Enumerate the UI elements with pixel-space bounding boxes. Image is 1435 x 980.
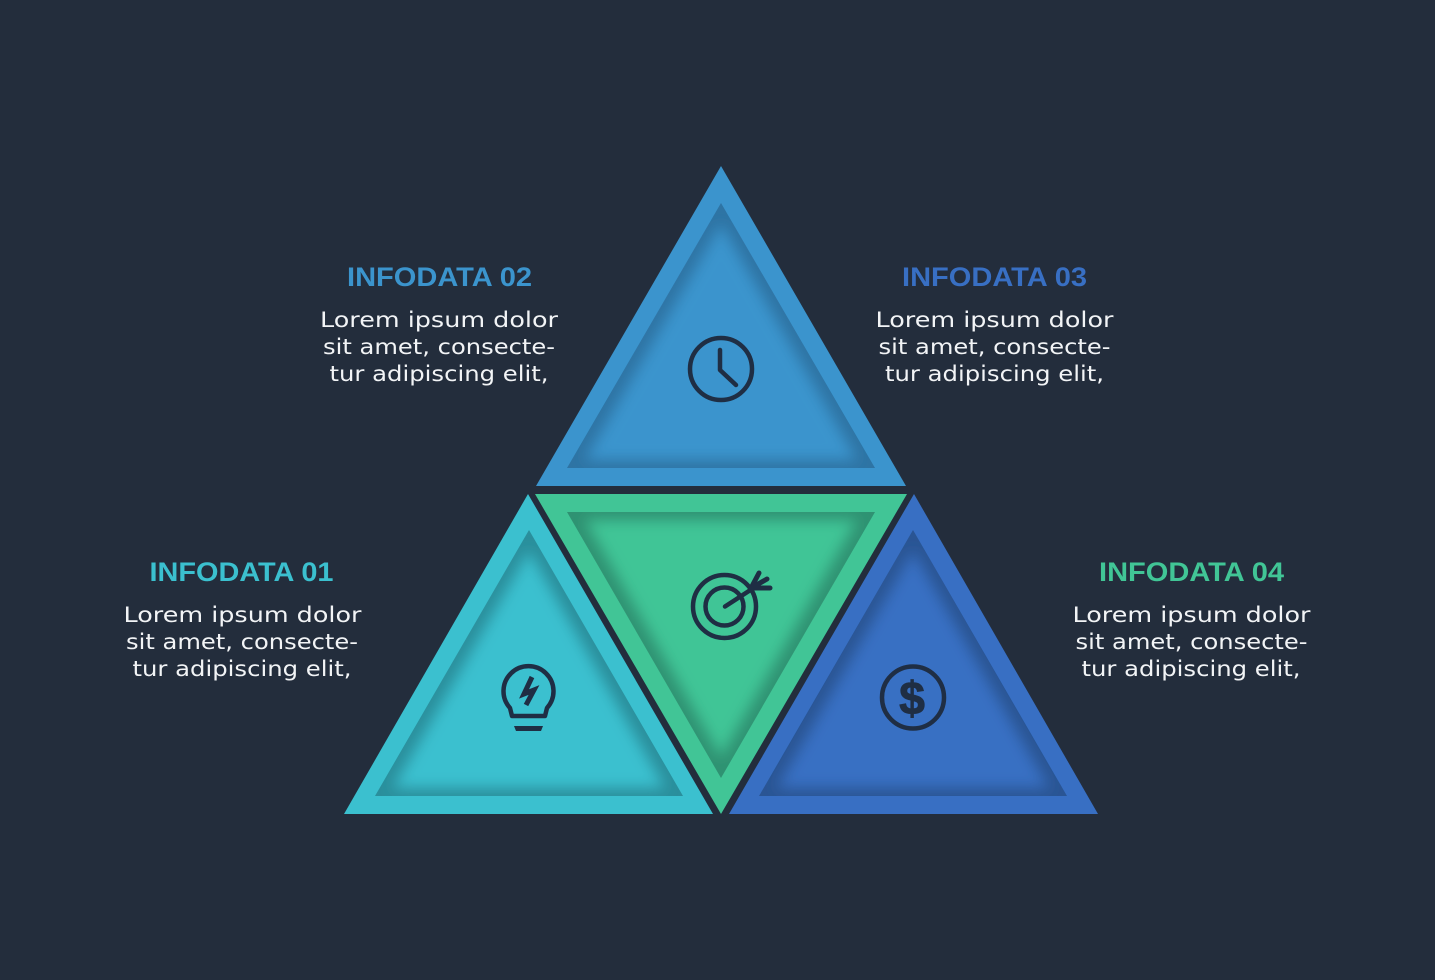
text block: Infodata 01: tur adipiscing elit, bbox=[132, 657, 352, 682]
text block: Infodata 02: sit amet, consecte- bbox=[323, 335, 555, 360]
text block: Infodata 03: INFODATA 03 bbox=[902, 262, 1087, 292]
text block: Infodata 01: INFODATA 01 bbox=[150, 557, 334, 587]
text block: Infodata 02 bbox=[320, 262, 558, 387]
triangle: left, Infodata 01 bbox=[344, 494, 713, 814]
triangle: top, Infodata 02 bbox=[536, 166, 906, 486]
text block: Infodata 01 bbox=[124, 557, 362, 682]
text block: Infodata 04: INFODATA 04 bbox=[1099, 557, 1284, 587]
icon: dollar coin: $ bbox=[899, 672, 925, 724]
text block: Infodata 02: tur adipiscing elit, bbox=[330, 362, 548, 387]
text block: Infodata 02: INFODATA 02 bbox=[347, 262, 532, 292]
text block: Infodata 01: Lorem ipsum dolor bbox=[124, 603, 362, 628]
triangle: right, Infodata 04 bbox=[729, 494, 1098, 814]
text block: Infodata 03: tur adipiscing elit, bbox=[885, 362, 1104, 387]
text block: Infodata 04: tur adipiscing elit, bbox=[1082, 657, 1300, 682]
text block: Infodata 03: Lorem ipsum dolor bbox=[876, 308, 1114, 333]
text block: Infodata 01: sit amet, consecte- bbox=[126, 630, 358, 655]
text block: Infodata 03: sit amet, consecte- bbox=[878, 335, 1110, 360]
triangle: centre, inverted green bbox=[535, 494, 907, 814]
text block: Infodata 04: Lorem ipsum dolor bbox=[1072, 603, 1311, 628]
icon: clock bbox=[690, 338, 752, 400]
text block: Infodata 04: sit amet, consecte- bbox=[1076, 630, 1308, 655]
icon: target with arrow bbox=[693, 573, 770, 638]
text block: Infodata 02: Lorem ipsum dolor bbox=[320, 308, 558, 333]
icon: dollar coin bbox=[882, 666, 944, 728]
text block: Infodata 04 bbox=[1072, 557, 1311, 682]
icon: light bulb with bolt bbox=[503, 666, 554, 731]
text block: Infodata 03 bbox=[876, 262, 1114, 387]
